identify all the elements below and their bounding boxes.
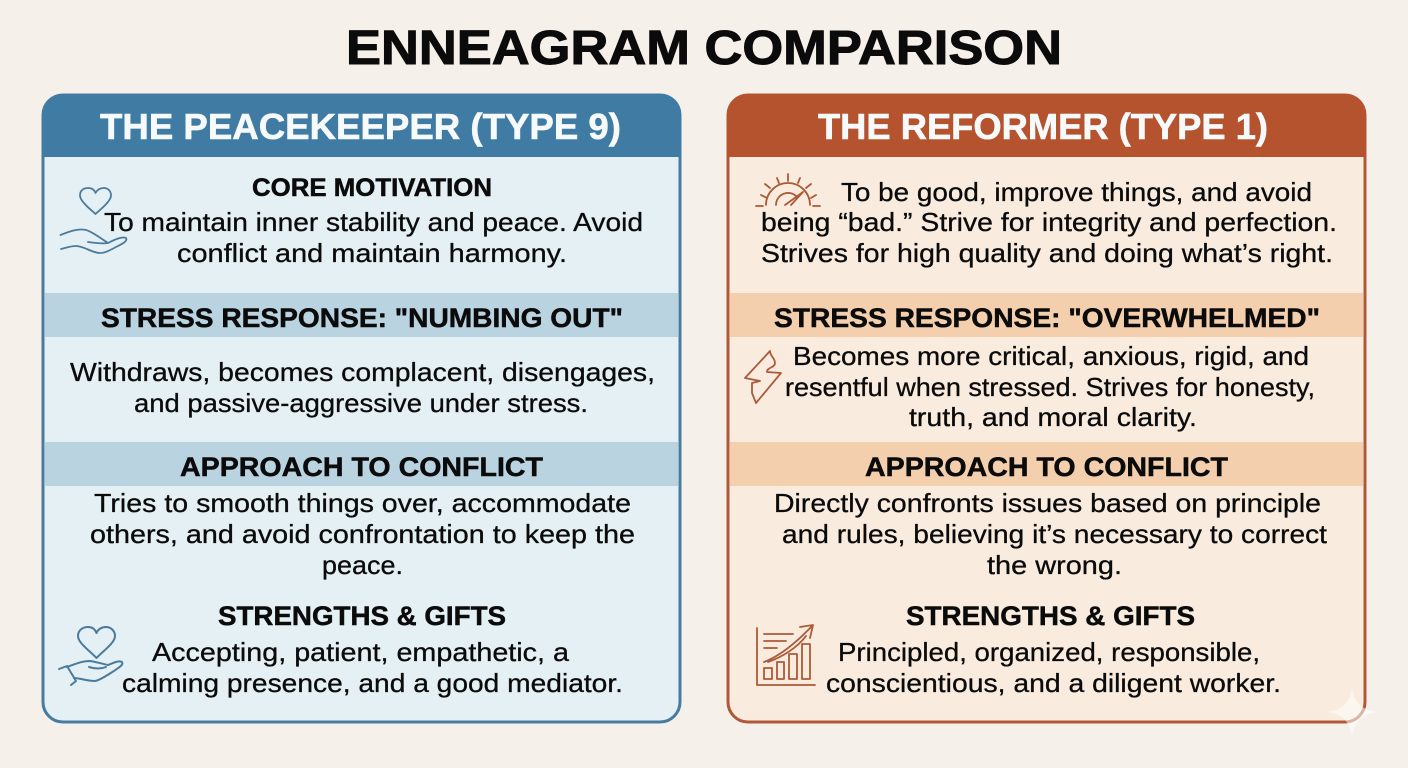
panel heading: THE PEACEKEEPER (TYPE 9) [100, 106, 621, 147]
section text: To be good, improve things, and avoid [841, 177, 1312, 207]
section text: calming presence, and a good mediator. [122, 668, 623, 698]
section text: Accepting, patient, empathetic, a [152, 637, 570, 667]
section: strengths and gifts [59, 601, 623, 698]
section text: conflict and maintain harmony. [177, 238, 567, 268]
section heading: APPROACH TO CONFLICT [180, 452, 544, 482]
heading band [730, 442, 1363, 486]
panel body [43, 95, 680, 722]
heading band [45, 442, 678, 486]
icon: lightning bolt [745, 351, 781, 403]
section text: Withdraws, becomes complacent, disengages, [70, 357, 655, 387]
heading band [45, 293, 678, 337]
icon: heart over open hand [59, 627, 122, 685]
panel header bar [42, 94, 681, 157]
section: approach to conflict [45, 442, 678, 580]
section text [70, 357, 655, 418]
section text: Strives for high quality and doing what’s right. [761, 238, 1333, 268]
section text: Directly confronts issues based on principle [774, 488, 1321, 518]
section text [104, 207, 643, 268]
section text: being “bad.” Strive for integrity and perfection. [761, 207, 1337, 237]
title: ENNEAGRAM COMPARISON [346, 22, 1062, 75]
section text [826, 637, 1281, 698]
section: approach to conflict [730, 442, 1363, 580]
heading band [730, 293, 1363, 337]
section text: Tries to smooth things over, accommodate [94, 488, 631, 518]
icon: heart over hand [60, 188, 126, 253]
section text: Becomes more critical, anxious, rigid, and [793, 341, 1309, 371]
section text [122, 637, 623, 698]
section heading: STRENGTHS & GIFTS [906, 601, 1195, 631]
section: core motivation [756, 174, 1337, 268]
section: stress response [730, 293, 1363, 432]
panel: the reformer (type 1) [727, 94, 1366, 722]
section: core motivation [60, 174, 643, 268]
section: strengths and gifts [757, 601, 1281, 698]
section text: truth, and moral clarity. [909, 402, 1197, 432]
section text [785, 341, 1315, 432]
section text: Principled, organized, responsible, [838, 637, 1260, 667]
icon: rising bar chart [757, 625, 815, 685]
section text: others, and avoid confrontation to keep the [90, 519, 635, 549]
section text: resentful when stressed. Strives for honesty, [785, 372, 1315, 402]
section text [761, 177, 1337, 268]
section text [90, 488, 635, 580]
section heading: STRESS RESPONSE: "NUMBING OUT" [101, 303, 623, 333]
section text: and passive-aggressive under stress. [134, 388, 588, 418]
panel header bar [727, 94, 1366, 157]
section text: the wrong. [987, 550, 1122, 580]
section heading: CORE MOTIVATION [252, 174, 492, 202]
section: stress response [45, 293, 678, 418]
section heading: STRESS RESPONSE: "OVERWHELMED" [774, 303, 1320, 333]
section heading: STRENGTHS & GIFTS [218, 601, 506, 631]
panel heading: THE REFORMER (TYPE 1) [818, 106, 1268, 147]
panel: the peacekeeper (type 9) [42, 94, 681, 722]
icon: sparkle watermark [1328, 688, 1376, 736]
section text [774, 488, 1328, 580]
section heading: APPROACH TO CONFLICT [865, 452, 1229, 482]
icon: gauge with rays [756, 174, 820, 206]
section text: peace. [322, 550, 403, 580]
panel body [728, 95, 1365, 722]
section text: To maintain inner stability and peace. Avoid [104, 207, 643, 237]
section text: and rules, believing it’s necessary to correct [782, 519, 1328, 549]
section text: conscientious, and a diligent worker. [826, 668, 1281, 698]
